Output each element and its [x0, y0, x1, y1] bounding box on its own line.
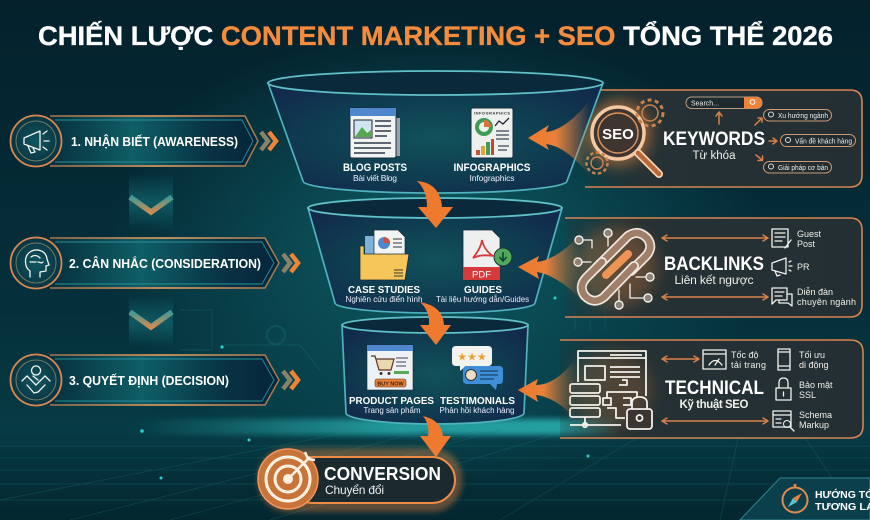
stage 1 label: 1. NHẬN BIẾT (AWARENESS): [71, 134, 238, 149]
icon: server and lock: [568, 351, 652, 429]
stage 3 label: 3. QUYẾT ĐỊNH (DECISION): [69, 373, 229, 388]
label: infographics: Infographics: [470, 173, 514, 183]
icon: infographics sheet: [471, 108, 513, 158]
funnel tier 2: [308, 198, 562, 313]
arrow: backlinks to funnel: [518, 235, 580, 298]
icon: target: [258, 449, 318, 509]
item: PR: PR: [797, 262, 810, 272]
icon: blog page: [350, 108, 400, 158]
keyword arrows: [716, 112, 777, 160]
label: case studies: CASE STUDIES: [348, 284, 420, 296]
arrow: tier 1 to tier 2: [417, 181, 453, 228]
item: page speed: Tốc độ: [731, 350, 759, 360]
chevrons: [261, 132, 276, 150]
label: infographics: [454, 162, 530, 183]
item: guest post: [772, 229, 822, 249]
arrow: technical to funnel: [518, 360, 575, 418]
label: guides: [436, 284, 529, 304]
subheading: Kỹ thuật SEO: [680, 399, 749, 411]
icon: brain head: [26, 250, 49, 277]
double arrows: [662, 356, 768, 424]
panel: backlinks: [565, 218, 862, 317]
double arrows: [662, 235, 768, 300]
item: SSL: SSL: [799, 390, 816, 400]
item: SSL: Bảo mật: [799, 380, 833, 390]
item: schema: Markup: [799, 420, 829, 430]
search box: Search...: [691, 100, 719, 108]
pill: trends: [764, 110, 832, 121]
item: forum: chuyên ngành: [797, 297, 856, 307]
item: mobile: [778, 349, 829, 370]
conversion sublabel: Chuyển đổi: [325, 483, 384, 497]
icon: infographics sheet: INFOGRAPHICS: [474, 110, 510, 116]
label: testimonials: [440, 395, 515, 415]
label: guides: Tài liệu hướng dẫn/Guides: [436, 295, 529, 304]
connector chevron 2: [129, 297, 173, 347]
stage 1: awareness: [10, 116, 276, 166]
item: schema: [773, 410, 832, 431]
pill: basic solutions: Giải pháp cơ bản: [778, 165, 828, 172]
label: blog posts: Bài viết Blog: [353, 173, 397, 183]
heading: keywords: KEYWORDS: [663, 129, 765, 150]
item: PR: [772, 258, 810, 276]
funnel tier 3: [342, 317, 528, 424]
label: case studies: Nghiên cứu điển hình: [346, 295, 422, 304]
icon: testimonials: ★★★: [457, 352, 487, 364]
pill: trends: Xu hướng ngành: [778, 113, 828, 120]
subheading: Liên kết ngược: [674, 273, 754, 287]
conversion label: CONVERSION: [324, 464, 441, 484]
chevrons: [283, 371, 298, 389]
icon: product page: BUY NOW: [377, 382, 405, 388]
label: blog posts: BLOG POSTS: [343, 162, 407, 174]
item: forum: Diễn đàn: [797, 287, 833, 297]
pill: basic solutions: [764, 162, 832, 173]
icon: chain link: [573, 227, 657, 309]
icon: testimonials: [452, 346, 503, 390]
icon: PDF guide: [463, 230, 512, 280]
label: blog posts: [343, 162, 407, 183]
item: guest post: Post: [797, 239, 816, 249]
item: SSL: [776, 378, 833, 400]
icon: PDF guide: PDF: [472, 270, 491, 280]
label: product pages: [349, 395, 434, 415]
stage 2: consideration: [10, 238, 298, 288]
label: testimonials: TESTIMONIALS: [440, 395, 515, 407]
item: schema: Schema: [799, 410, 832, 420]
arrow: tier 3 to conversion: [420, 416, 451, 457]
title: CHIẾN LƯỢC CONTENT MARKETING + SEO TỔNG THỂ 2026: [38, 20, 833, 51]
icon: megaphone: [24, 131, 49, 153]
pill: customer problems: [780, 134, 856, 146]
item: page speed: tải trang: [731, 360, 766, 370]
icon: case study folder: [360, 230, 409, 280]
label: product pages: Trang sản phẩm: [364, 406, 421, 415]
item: mobile: di động: [799, 360, 829, 370]
funnel tier 1: [268, 71, 603, 193]
icon: handshake: [22, 366, 50, 393]
stage 2 label: 2. CÂN NHẮC (CONSIDERATION): [69, 256, 261, 271]
icon: SEO magnifier: [586, 100, 663, 174]
item: page speed: [703, 350, 766, 370]
panel: technical: [560, 340, 863, 438]
icon: product page: [367, 345, 413, 390]
icon: compass: [782, 484, 808, 512]
subheading: Từ khóa: [692, 150, 736, 162]
item: forum: [772, 287, 856, 307]
heading: backlinks: BACKLINKS: [664, 254, 764, 275]
connector chevron 1: [129, 175, 173, 230]
item: guest post: Guest: [797, 229, 822, 239]
heading: technical: TECHNICAL: [665, 378, 764, 399]
search box: [686, 97, 762, 108]
stage 3: decision: [10, 354, 298, 406]
arrow: tier 2 to tier 3: [420, 302, 451, 345]
arrow: keywords to funnel: [528, 100, 590, 176]
conversion badge: [258, 448, 462, 512]
label: infographics: INFOGRAPHICS: [454, 162, 530, 174]
icon: SEO magnifier: SEO: [602, 126, 634, 143]
panel: keywords: [585, 90, 862, 187]
item: mobile: Tối ưu: [799, 350, 825, 360]
pill: customer problems: Vấn đề khách hàng: [795, 136, 852, 146]
label: guides: GUIDES: [464, 284, 502, 296]
future badge: [740, 478, 870, 520]
chevrons: [283, 254, 298, 272]
label: testimonials: Phản hồi khách hàng: [440, 406, 514, 415]
label: case studies: [346, 284, 422, 304]
label: product pages: PRODUCT PAGES: [349, 395, 434, 407]
